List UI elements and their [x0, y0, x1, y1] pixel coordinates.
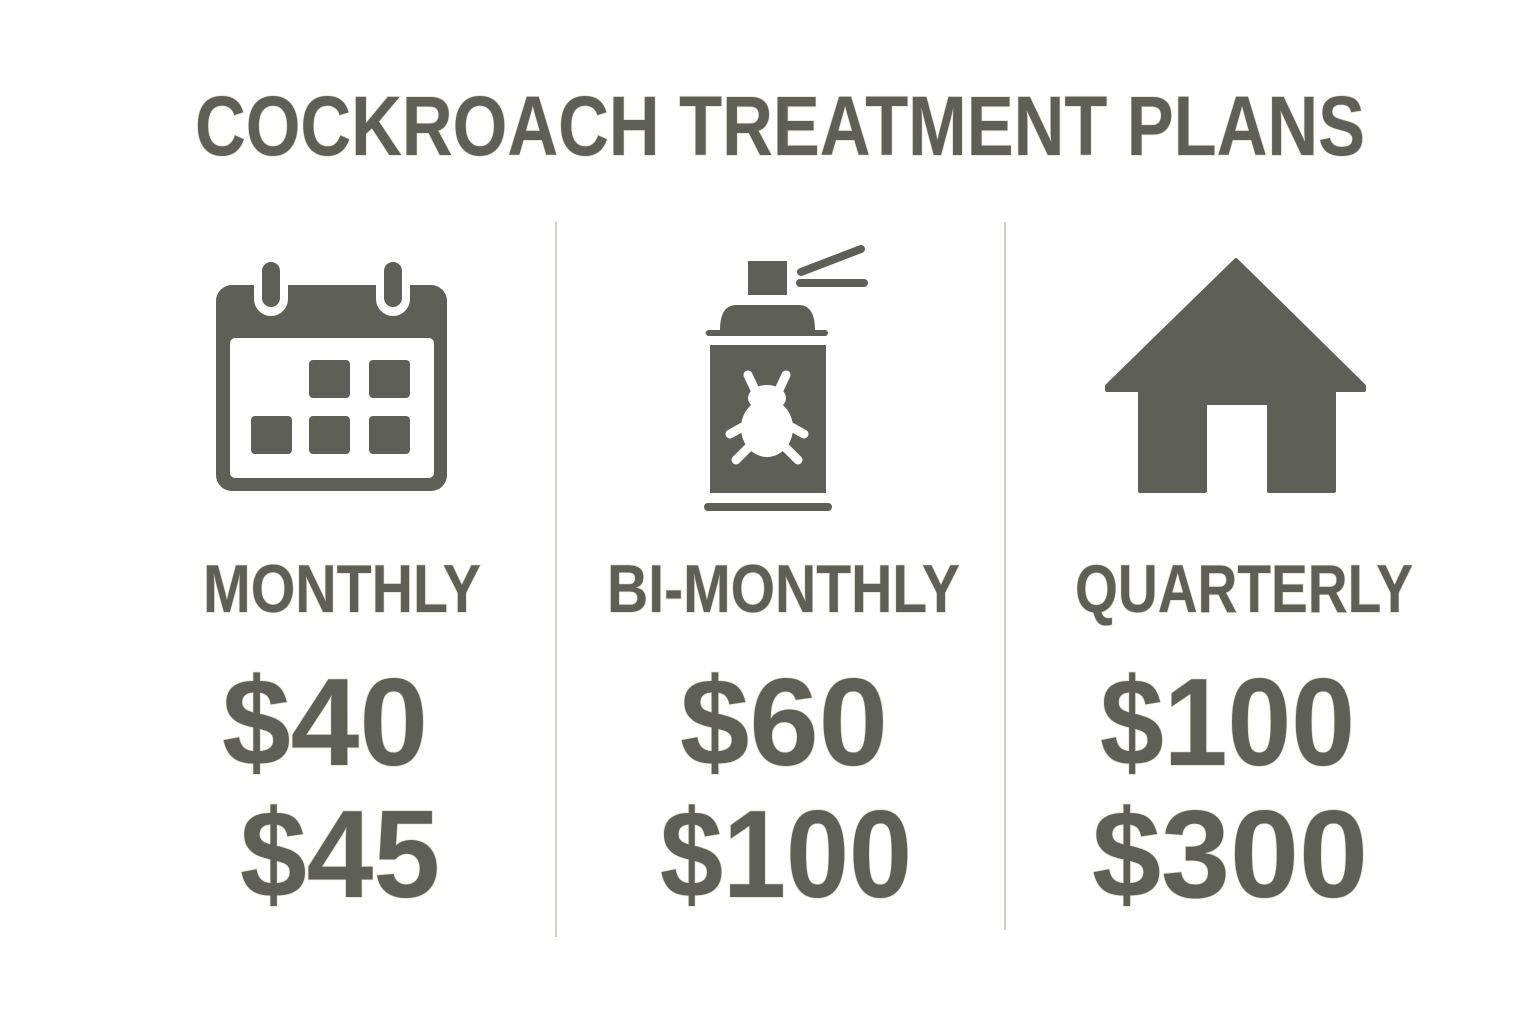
- icon: spray can: [704, 249, 864, 511]
- price: $45: $45: [240, 786, 440, 924]
- price: $100: $100: [1100, 654, 1355, 792]
- icon: house: [1107, 260, 1364, 491]
- panel: monthly: [203, 256, 481, 924]
- panel: quarterly: [1075, 260, 1413, 924]
- label: quarterly: QUARTERLY: [1075, 551, 1413, 627]
- price: $300: $300: [1092, 786, 1368, 924]
- price: $40: $40: [222, 654, 428, 792]
- price: $100: $100: [660, 786, 912, 924]
- panel: bi-monthly: [607, 249, 960, 924]
- label: bi-monthly: BI-MONTHLY: [607, 551, 960, 627]
- price: $60: $60: [680, 654, 888, 792]
- bug: [730, 375, 804, 460]
- label: monthly: MONTHLY: [203, 551, 481, 627]
- icon: calendar: [216, 256, 447, 491]
